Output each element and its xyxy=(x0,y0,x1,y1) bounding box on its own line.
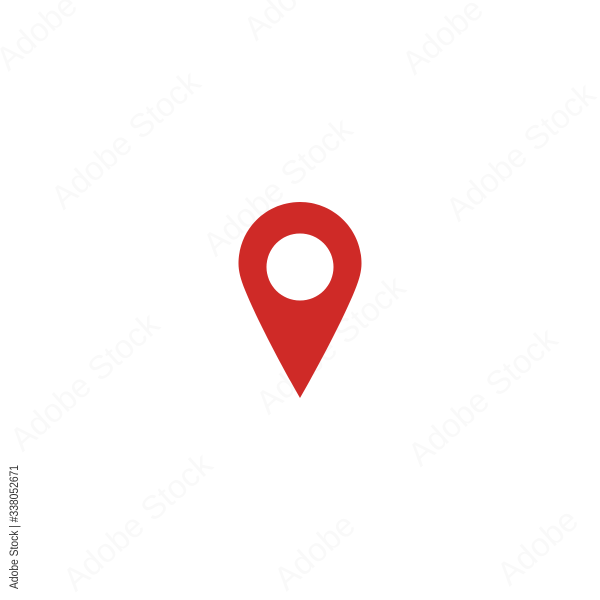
watermark pattern: Adobe Stock xyxy=(195,110,360,263)
watermark pattern: Adobe Stock xyxy=(248,268,413,421)
watermark pattern: Adobe xyxy=(489,501,585,592)
stock image credit: Adobe Stock | #338052671 xyxy=(9,465,21,589)
watermark pattern: Adobe Stock xyxy=(438,75,600,228)
watermark pattern: Adobe Stock xyxy=(55,445,220,598)
watermark pattern: Adobe Stock xyxy=(400,320,565,473)
watermark pattern: Adobe Stock xyxy=(2,305,167,458)
watermark pattern: Adobe Stock xyxy=(43,63,208,216)
watermark pattern: Adobe xyxy=(266,506,362,597)
icon: red map location pin xyxy=(238,202,362,398)
